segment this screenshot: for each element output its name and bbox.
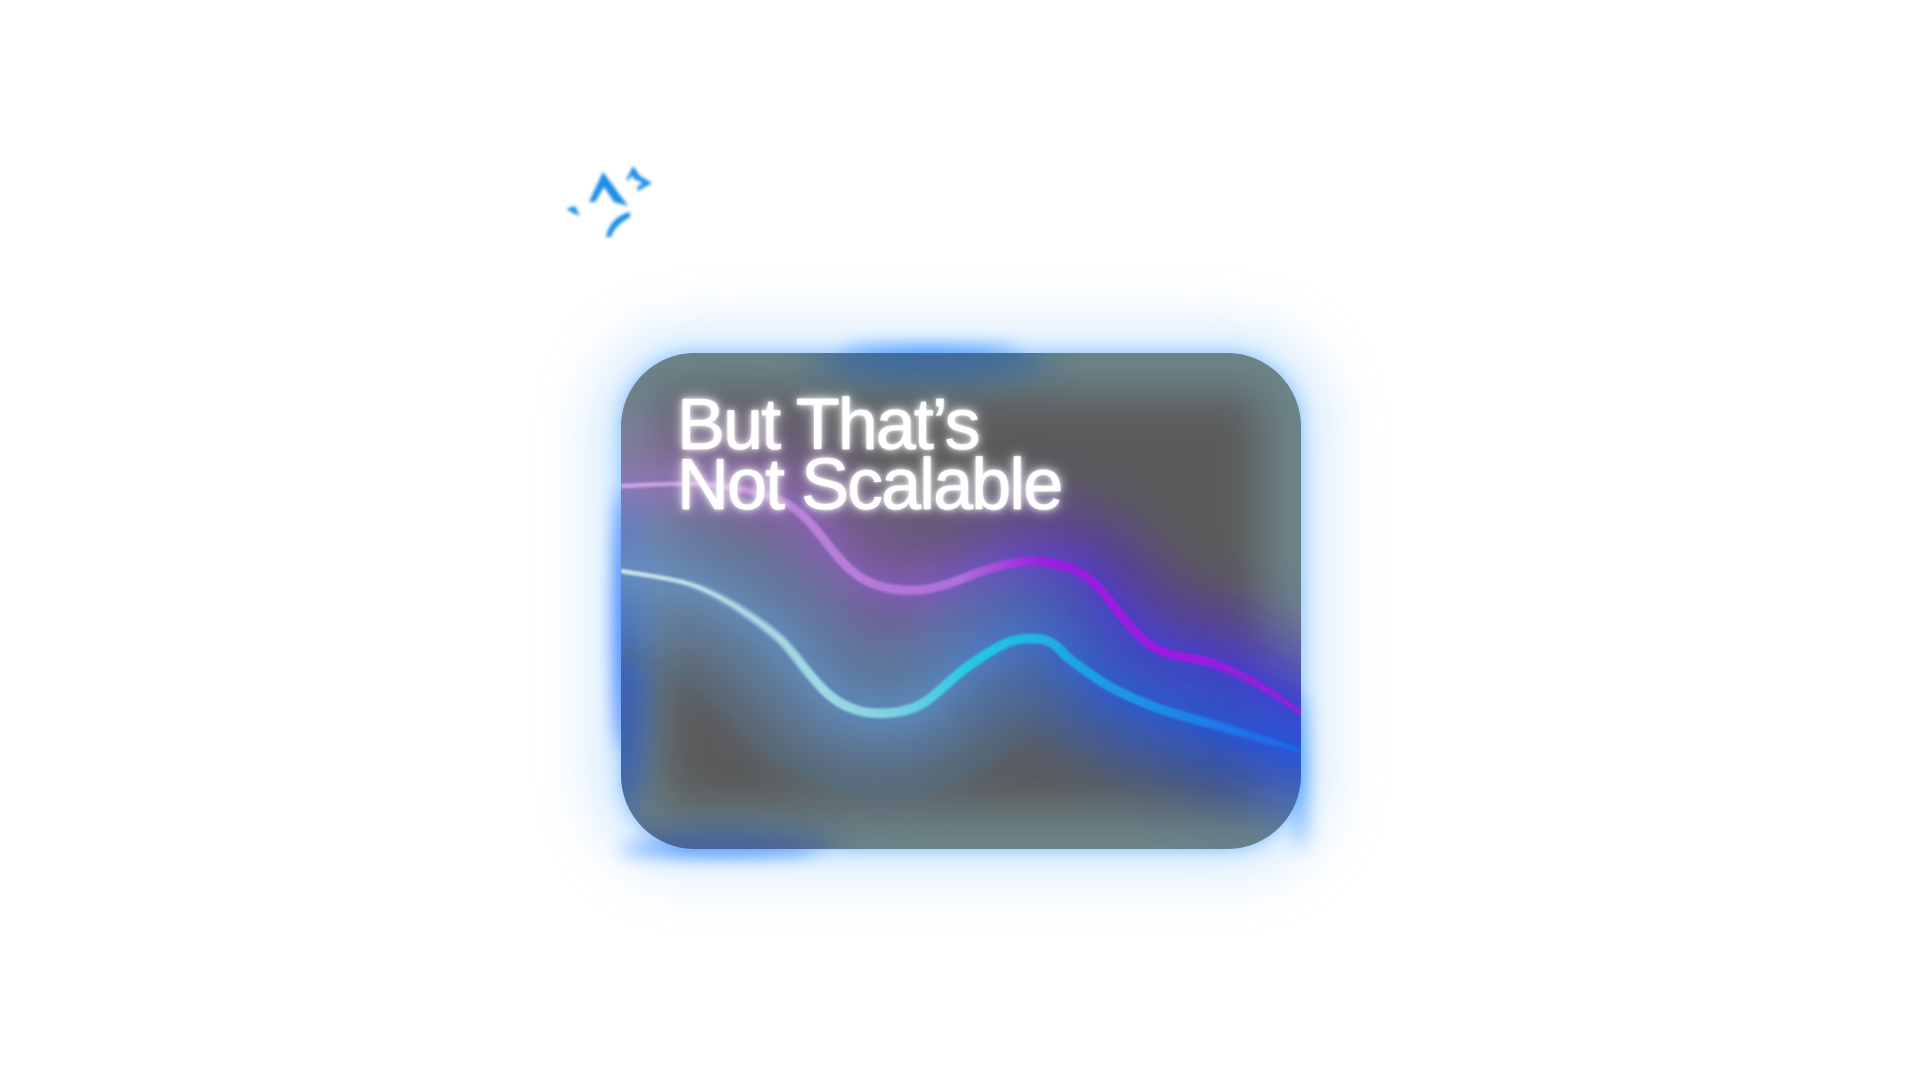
sparkle: top right <box>626 166 652 191</box>
faint lower curve <box>621 650 890 792</box>
purple neon line <box>621 484 1301 713</box>
sparkle: large chevron <box>589 172 628 206</box>
sparkle: small left <box>566 206 580 216</box>
cyan curve glow <box>621 571 1301 751</box>
teal edge glow <box>621 353 1301 849</box>
panel: dark rounded card <box>621 353 1301 849</box>
purple curve glow <box>621 484 1301 713</box>
outer blue glow <box>595 330 1327 872</box>
title: Not Scalable <box>677 445 1061 525</box>
title: But That’s <box>677 385 979 465</box>
sparkle: lower arc <box>606 212 630 237</box>
icon: sparkle marks <box>566 166 652 237</box>
glowing card illustration <box>564 164 1350 896</box>
cyan neon line <box>621 571 1301 751</box>
title <box>672 385 1069 525</box>
